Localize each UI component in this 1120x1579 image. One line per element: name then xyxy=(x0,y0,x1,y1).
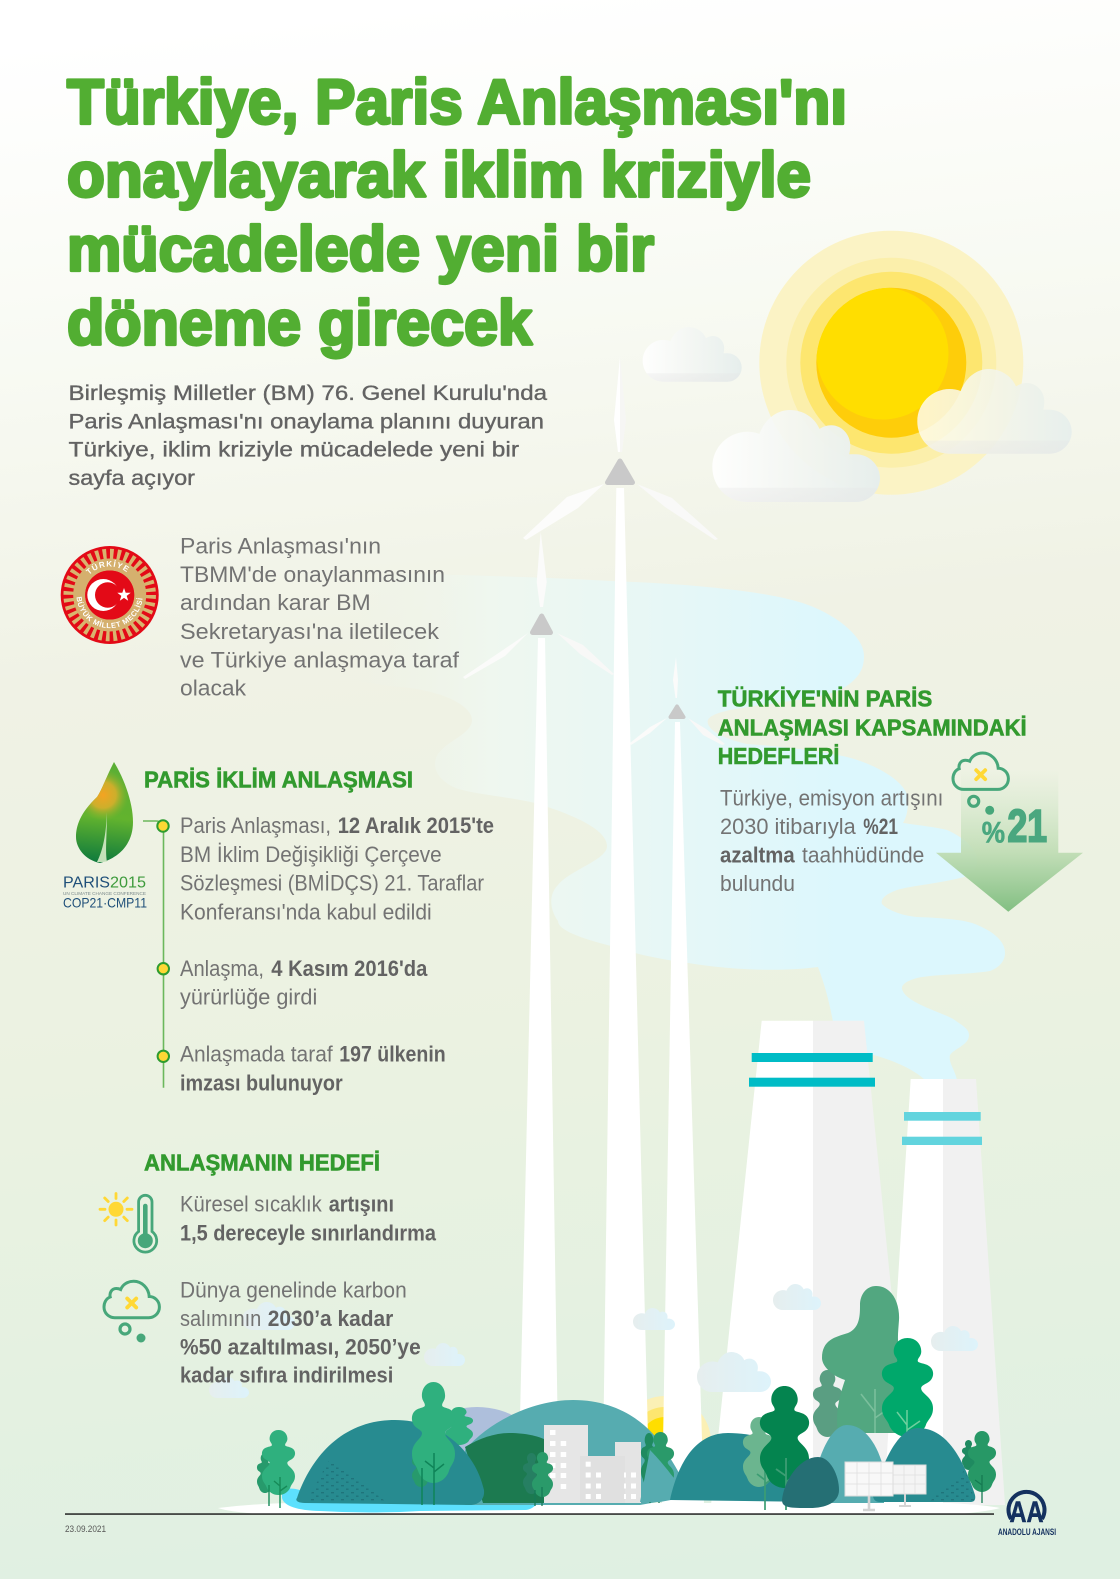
tree back right xyxy=(813,1370,842,1437)
targets text: bulundu xyxy=(720,871,795,896)
paragraph: TBMM approval: Paris Anlaşması'nın xyxy=(180,533,381,558)
intro paragraph: sayfa açıyor xyxy=(68,467,195,490)
targets text: azaltma xyxy=(720,842,795,867)
lake xyxy=(282,1488,540,1512)
timeline text: signatories: imzası bulunuyor xyxy=(180,1070,343,1095)
paragraph: TBMM approval: ardından karar BM xyxy=(180,590,371,615)
date: 23.09.2021 xyxy=(65,1524,106,1534)
ground xyxy=(218,1503,1000,1514)
timeline text: entry into force: Anlaşma, xyxy=(180,956,264,981)
teal hill bottom right of sun xyxy=(640,1450,687,1502)
heading: Türkiye's targets: TÜRKİYE'NİN PARİS xyxy=(718,686,932,712)
goal text: carbon: 2030’a kadar xyxy=(268,1306,394,1331)
timeline text: entry into force: yürürlüğe girdi xyxy=(180,985,317,1010)
Anadolu Ajansi logo: ANADOLU AJANSI xyxy=(998,1527,1056,1537)
title: döneme girecek xyxy=(67,288,533,358)
intro paragraph: Paris Anlaşması'nı onaylama planını duyuran xyxy=(68,410,544,433)
timeline text: adoption: 12 Aralık 2015'te xyxy=(338,813,494,838)
icon: TBMM seal: TÜRKİYE xyxy=(86,560,130,574)
icon: Paris 2015 COP21 logo: UN CLIMATE CHANGE CONFERENCE xyxy=(63,891,146,896)
icon: TBMM seal: BÜYÜK MİLLET MECLİSİ xyxy=(76,596,143,628)
title: onaylayarak iklim kriziyle xyxy=(67,140,811,210)
title: Türkiye, Paris Anlaşması'nı xyxy=(67,68,847,138)
cloud: lower left of sun xyxy=(712,410,880,502)
cloud: top small xyxy=(643,327,742,382)
goal text: temperature xyxy=(180,1192,437,1246)
icon: TBMM seal xyxy=(60,546,159,644)
icon: Paris 2015 COP21 logo: 2015 xyxy=(110,875,146,892)
sun xyxy=(759,231,1023,495)
footer rule xyxy=(65,1513,994,1515)
title: mücadelede yeni bir xyxy=(67,214,654,284)
light teal hill xyxy=(465,1400,686,1505)
tree group by buildings xyxy=(523,1452,553,1506)
wind turbine 2 (middle) xyxy=(463,532,614,1505)
timeline text: signatories: 197 ülkenin xyxy=(339,1042,446,1067)
Anadolu Ajansi logo: AA xyxy=(1010,1496,1044,1529)
targets text: %21 xyxy=(863,814,898,839)
timeline text: adoption: Konferansı'nda kabul edildi xyxy=(180,899,432,924)
right teal hill xyxy=(873,1428,975,1502)
right-of-buildings trees xyxy=(641,1432,674,1503)
goal text: carbon: Dünya genelinde karbon xyxy=(180,1277,407,1302)
goal text: carbon: kadar sıfıra indirilmesi xyxy=(180,1363,393,1388)
heading: Türkiye's targets: ANLAŞMASI KAPSAMINDAKİ xyxy=(718,714,1027,740)
intro paragraph: Türkiye, iklim kriziyle mücadelede yeni bir xyxy=(68,439,519,462)
timeline text: entry into force: 4 Kasım 2016'da xyxy=(271,956,428,981)
timeline xyxy=(143,820,169,1088)
icon: Paris 2015 COP21 logo: PARIS xyxy=(63,875,110,892)
targets text: taahhüdünde xyxy=(802,842,924,867)
heading: Türkiye's targets xyxy=(718,686,1027,769)
title xyxy=(67,68,847,358)
goal text: carbon xyxy=(180,1277,421,1388)
medium teal hill xyxy=(670,1433,820,1502)
lilac hill xyxy=(417,1407,537,1493)
timeline text: adoption: Paris Anlaşması, xyxy=(180,813,331,838)
icon: carbon cloud xyxy=(104,1281,159,1342)
large blob tree xyxy=(822,1286,905,1433)
small background clouds xyxy=(209,1284,978,1398)
goal text: temperature: Küresel sıcaklık xyxy=(180,1192,323,1217)
timeline text: adoption: BM İklim Değişikliği Çerçeve xyxy=(180,842,442,867)
paragraph: TBMM approval: ve Türkiye anlaşmaya taraf xyxy=(180,648,460,673)
goal text: temperature: artışını xyxy=(329,1192,394,1217)
icon: carbon cloud over arrow xyxy=(953,753,1008,815)
wind turbine 1 (large) xyxy=(523,357,718,1505)
paragraph: TBMM approval: TBMM'de onaylanmasının xyxy=(180,562,445,587)
hill dots xyxy=(307,1458,385,1501)
targets text: 2030 itibarıyla xyxy=(720,814,856,839)
goal text: carbon: %50 azaltılması, 2050’ye xyxy=(180,1335,421,1360)
timeline text: signatories: Anlaşmada taraf xyxy=(180,1042,334,1067)
Anadolu Ajansi logo xyxy=(998,1492,1056,1537)
small sun behind hills xyxy=(619,1396,711,1488)
light and dark trees xyxy=(743,1386,809,1510)
dark green hill xyxy=(465,1433,550,1503)
tree back of big hill xyxy=(445,1407,473,1445)
bright green tree xyxy=(882,1338,933,1437)
light teal hill right xyxy=(810,1425,884,1503)
tree group far left xyxy=(257,1430,295,1508)
heading: Türkiye's targets: HEDEFLERİ xyxy=(718,743,839,769)
paragraph: TBMM approval xyxy=(180,533,460,701)
timeline text: adoption: Sözleşmesi (BMİDÇS) 21. Taraflar xyxy=(180,871,484,896)
paragraph: TBMM approval: Sekretaryası'na iletilecek xyxy=(180,619,440,644)
timeline text: adoption xyxy=(180,813,494,924)
arrow down with 21 percent xyxy=(936,770,1083,912)
goal text: carbon: salımının xyxy=(180,1306,261,1331)
arrow down with 21 percent: 21 xyxy=(1008,800,1047,852)
cloud: right of sun xyxy=(917,369,1072,454)
hill dots right xyxy=(930,1470,975,1501)
icon: Paris 2015 COP21 logo xyxy=(63,762,147,911)
timeline text: signatories xyxy=(180,1042,446,1095)
buildings xyxy=(544,1425,641,1503)
intro paragraph xyxy=(68,382,547,490)
dark blob hill xyxy=(782,1457,839,1508)
chimney 1 (large) xyxy=(711,1021,913,1505)
smoke cloud from chimneys xyxy=(298,574,1005,1080)
solar panels xyxy=(845,1462,926,1510)
icon: sun and thermometer xyxy=(100,1194,157,1252)
big teal hill xyxy=(296,1420,484,1505)
heading: goal of the agreement: ANLAŞMANIN HEDEFİ xyxy=(144,1150,380,1176)
chimney 2 (small) xyxy=(884,1079,1005,1505)
paragraph: TBMM approval: olacak xyxy=(180,676,247,701)
wind turbine 3 (small) xyxy=(630,657,725,1505)
targets text xyxy=(720,785,943,896)
heading: Paris climate agreement: PARİS İKLİM ANLAŞMASI xyxy=(144,766,413,792)
goal text: temperature: 1,5 dereceyle sınırlandırma xyxy=(180,1221,437,1246)
tree group centre xyxy=(412,1382,455,1505)
intro paragraph: Birleşmiş Milletler (BM) 76. Genel Kurulu'nda xyxy=(68,382,547,405)
landscape: hills, lake, trees, buildings xyxy=(257,1286,996,1512)
far right trees xyxy=(962,1431,996,1503)
arrow down with 21 percent: % xyxy=(982,816,1005,849)
icon: Paris 2015 COP21 logo: COP21·CMP11 xyxy=(63,895,147,911)
targets text: Türkiye, emisyon artışını xyxy=(720,785,943,810)
timeline text: entry into force xyxy=(180,956,428,1010)
